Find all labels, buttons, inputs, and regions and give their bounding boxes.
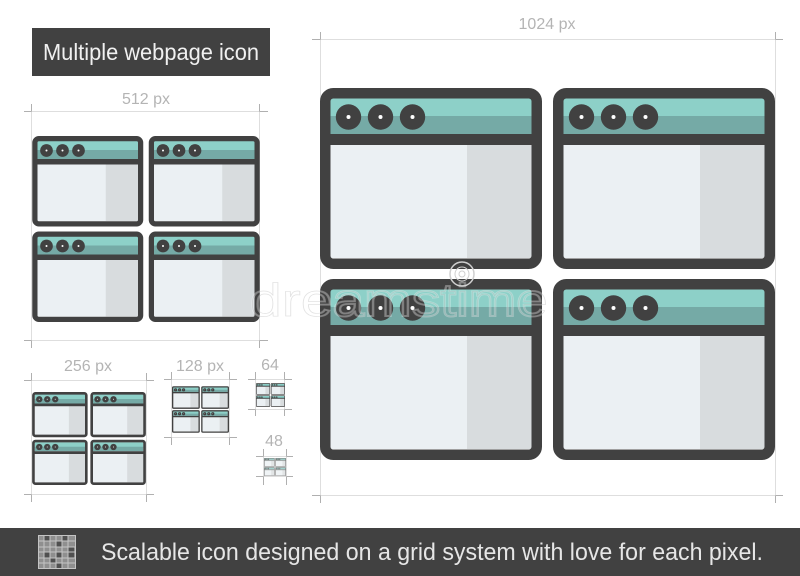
watermark: dreamstime bbox=[250, 274, 548, 326]
guides: 128 px bbox=[164, 372, 237, 445]
icon: multiple webpages 64 px bbox=[256, 383, 285, 407]
icon: multiple webpages 128 px bbox=[173, 387, 228, 432]
title: Multiple webpage icon bbox=[43, 39, 259, 65]
guides: 1024 px bbox=[312, 32, 783, 503]
size label: 1024 px: 1024 px bbox=[519, 16, 575, 33]
icon: multiple webpages 1024 px bbox=[325, 93, 770, 455]
size label: 64: 64 bbox=[261, 357, 279, 374]
watermark: dreamstime bbox=[250, 274, 548, 326]
size label: 128 px: 128 px bbox=[176, 358, 224, 375]
size label: 512 px: 512 px bbox=[122, 91, 170, 108]
icon: pixel grid bbox=[38, 535, 76, 569]
guides: 256 px bbox=[24, 373, 154, 502]
icon: multiple webpages 512 px bbox=[35, 139, 257, 319]
icon: multiple webpages 256 px bbox=[33, 393, 145, 484]
guides: 512 px bbox=[24, 104, 268, 348]
footer band bbox=[0, 528, 800, 576]
size label: 256 px: 256 px bbox=[64, 358, 112, 375]
guides: 64 bbox=[248, 372, 292, 416]
icon: multiple webpages 48 px bbox=[264, 458, 286, 476]
size label: 48: 48 bbox=[265, 433, 283, 450]
watermark bbox=[250, 262, 548, 326]
tagline: Scalable icon designed on a grid system with love for each pixel. bbox=[101, 539, 763, 566]
guides: 48 bbox=[256, 449, 293, 485]
title bbox=[32, 28, 270, 76]
